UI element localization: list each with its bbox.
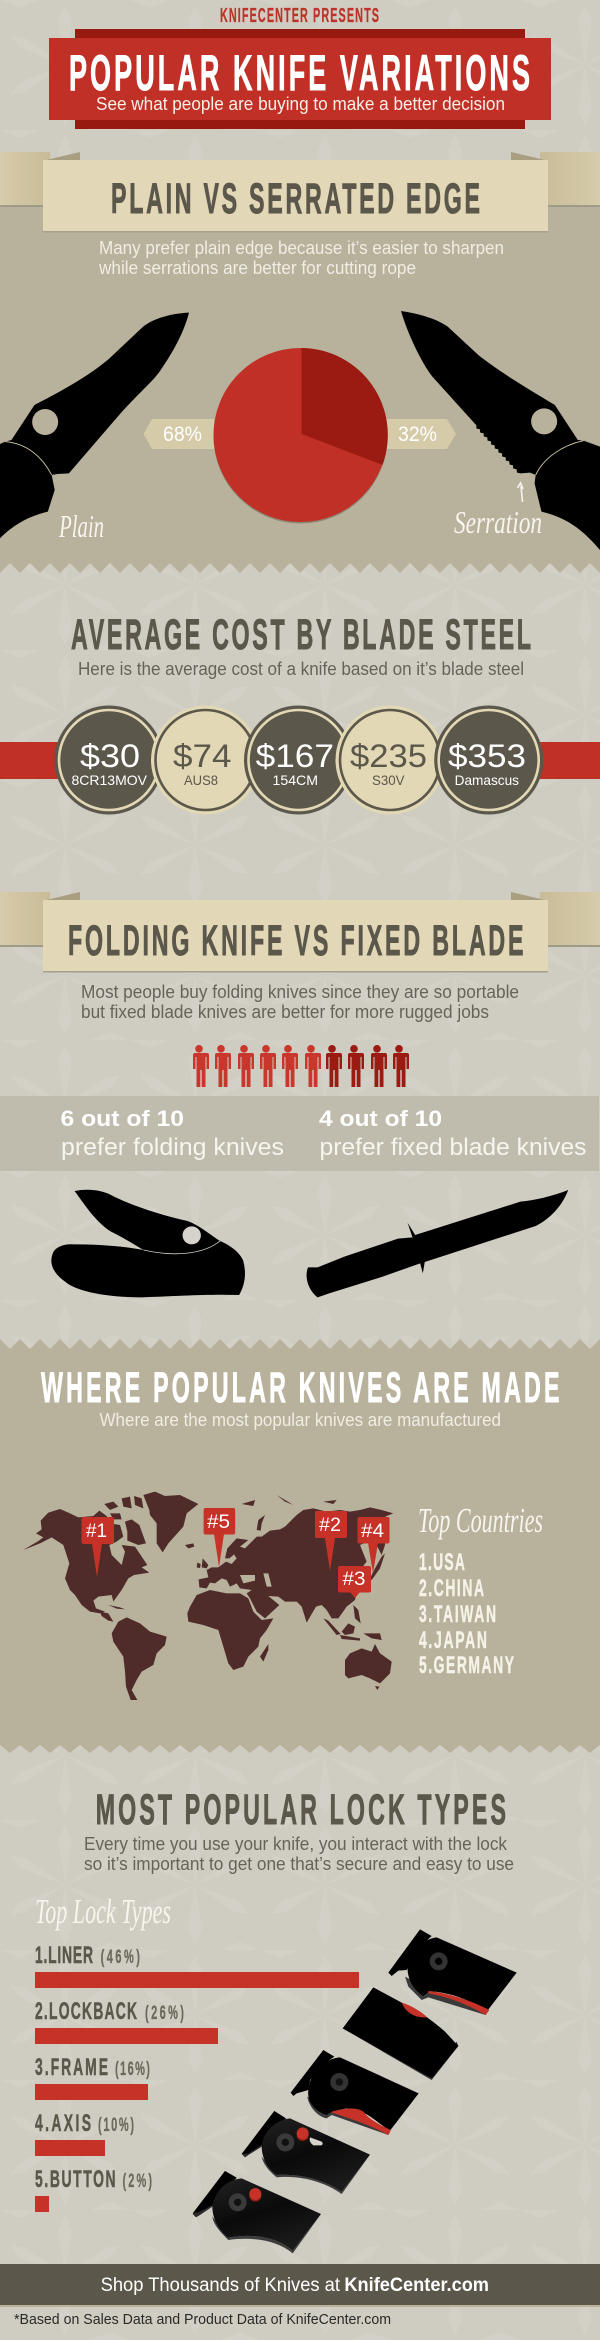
world map <box>23 1492 393 1700</box>
bar: lockback 26 percent: 2.LOCKBACK <box>35 1998 137 2025</box>
bar: frame 16 percent: (16%) <box>115 2059 150 2080</box>
label: plain: Plain <box>58 508 104 544</box>
intro text: folding vs fixed: Most people buy folding knives since they are so portable <box>81 982 519 1002</box>
ribbon heading: folding vs fixed <box>0 892 600 972</box>
price badge: Damascus: Damascus <box>455 772 519 788</box>
heading: lock types: MOST POPULAR LOCK TYPES <box>96 1787 506 1834</box>
intro text: lock types: so it’s important to get one that’s secure and easy to use <box>84 1854 514 1874</box>
stat: fixed blade: 4 out of 10 <box>319 1106 442 1131</box>
map pin #3 Taiwan: #3 <box>342 1569 366 1590</box>
stat: fixed blade: prefer fixed blade knives <box>320 1134 586 1161</box>
intro text: plain vs serrated: while serrations are better for cutting rope <box>98 258 416 278</box>
intro text: plain vs serrated: Many prefer plain edge because it’s easier to sharpen <box>99 238 504 258</box>
subtitle: See what people are buying to make a better decision <box>96 94 505 114</box>
list: top countries: 3.TAIWAN <box>419 1601 496 1628</box>
list: top countries: 4.JAPAN <box>419 1627 487 1654</box>
tag: 32 percent: 32% <box>398 423 437 446</box>
tag: 68 percent: 68% <box>163 423 202 446</box>
ribbon heading: plain vs serrated <box>0 152 600 232</box>
list: top countries: 2.CHINA <box>419 1575 484 1602</box>
bar: lockback 26 percent <box>35 1998 218 2044</box>
pictogram: ten people, six vs four <box>191 1045 409 1087</box>
stat: fixed blade <box>319 1106 586 1161</box>
bar: frame 16 percent <box>35 2054 150 2100</box>
price badge: AUS8: $74 <box>173 738 232 774</box>
icon: fixed blade knife <box>307 1190 568 1297</box>
price badge: 154CM: $167 <box>256 738 334 774</box>
heading: average cost: AVERAGE COST BY BLADE STEEL <box>71 612 531 659</box>
intro text: where knives are made: Where are the most popular knives are manufactured <box>100 1410 501 1430</box>
map pin #4 Japan: #4 <box>361 1521 384 1542</box>
icon: liner lock knife <box>388 1929 517 2015</box>
stat: folding: prefer folding knives <box>61 1134 284 1161</box>
price badge: 8CR13MOV <box>54 706 164 814</box>
map pin #2 China <box>315 1511 347 1571</box>
arrow to serrations <box>518 483 523 502</box>
tag: 68 percent <box>144 419 214 449</box>
map pin #5 Germany: #5 <box>207 1512 230 1533</box>
bar: button 2 percent: 5.BUTTON <box>35 2166 116 2193</box>
main title: POPULAR KNIFE VARIATIONS <box>69 45 530 101</box>
intro text: folding vs fixed: but fixed blade knives are better for more rugged jobs <box>81 1002 489 1022</box>
price badge: AUS8: AUS8 <box>184 772 218 788</box>
stat band: preference counts <box>0 1096 599 1171</box>
heading: top lock types: Top Lock Types <box>35 1892 171 1931</box>
background: tan section with zigzag bottom <box>0 205 600 573</box>
price badge: S30V <box>336 706 444 814</box>
tag: 32 percent <box>386 419 456 449</box>
title banner <box>49 29 551 129</box>
price badge: Damascus: $353 <box>448 738 526 774</box>
bar: button 2 percent <box>35 2166 152 2212</box>
map pin #4 Japan <box>358 1517 390 1573</box>
stat: folding <box>60 1106 284 1161</box>
map pin #1 USA <box>82 1517 114 1577</box>
bar: lockback 26 percent: (26%) <box>145 2003 184 2024</box>
map pin #3 Taiwan <box>338 1566 371 1598</box>
heading: where knives are made: WHERE POPULAR KNIVES ARE MADE <box>41 1365 560 1412</box>
map pin #5 Germany <box>204 1508 235 1567</box>
intro text: average cost: Here is the average cost of a knife based on it’s blade steel <box>78 659 524 679</box>
heading text: PLAIN VS SERRATED EDGE <box>111 176 480 223</box>
footer call to action <box>101 2275 489 2296</box>
price badge: 8CR13MOV: $30 <box>80 738 140 774</box>
bar: liner 46 percent <box>35 1942 359 1988</box>
price badge: AUS8 <box>151 706 260 814</box>
red band behind price circles <box>0 742 600 779</box>
icon: folding knife <box>51 1190 245 1297</box>
bar: button 2 percent: (2%) <box>122 2171 152 2192</box>
icon: frame lock knife <box>291 2050 419 2135</box>
icon: serrated knife <box>401 311 600 550</box>
list: top countries: 5.GERMANY <box>419 1652 514 1679</box>
footer call to action: Shop Thousands of Knives at <box>101 2275 341 2296</box>
footer call to action: KnifeCenter.com <box>344 2275 489 2296</box>
map pin #1 USA: #1 <box>86 1521 107 1542</box>
background: tan map section with zigzag edges <box>0 1339 600 1753</box>
intro text: plain vs serrated <box>98 238 504 278</box>
icon: lockback knife <box>343 1987 458 2080</box>
intro text: lock types <box>84 1834 514 1874</box>
intro text: lock types: Every time you use your knife, you interact with the lock <box>84 1834 508 1854</box>
bar chart: lock type share <box>35 1942 359 2212</box>
bar: liner 46 percent: 1.LINER <box>35 1942 93 1969</box>
intro text: folding vs fixed <box>81 982 519 1022</box>
price badge: 8CR13MOV: 8CR13MOV <box>72 772 148 788</box>
bar: axis 10 percent: 4.AXIS <box>35 2110 91 2137</box>
list: top countries: 1.USA <box>419 1549 465 1576</box>
price badge: S30V: S30V <box>372 772 405 788</box>
bar: frame 16 percent: 3.FRAME <box>35 2054 108 2081</box>
price badge: 154CM <box>244 706 353 814</box>
map pin #2 China: #2 <box>319 1515 341 1536</box>
bar: axis 10 percent <box>35 2110 134 2156</box>
label: serration: Serration <box>454 504 542 540</box>
source note: *Based on Sales Data and Product Data of KnifeCenter.com <box>14 2311 391 2328</box>
icon: plain edge knife <box>0 313 189 538</box>
icon: button lock knife <box>193 2171 321 2253</box>
icon: axis lock knife <box>242 2111 370 2194</box>
price badge: 154CM: 154CM <box>272 772 318 788</box>
pie chart: plain vs serrated share <box>214 348 388 524</box>
bar: liner 46 percent: (46%) <box>101 1947 140 1968</box>
list: top countries <box>419 1549 514 1679</box>
price badge: S30V: $235 <box>350 738 427 774</box>
bar: axis 10 percent: (10%) <box>98 2115 134 2136</box>
price badge: Damascus <box>434 706 543 814</box>
stat: folding: 6 out of 10 <box>60 1106 184 1131</box>
presenter line: KNIFECENTER PRESENTS <box>220 5 379 27</box>
heading text: FOLDING KNIFE VS FIXED BLADE <box>68 918 523 965</box>
footer bar <box>0 2264 600 2307</box>
